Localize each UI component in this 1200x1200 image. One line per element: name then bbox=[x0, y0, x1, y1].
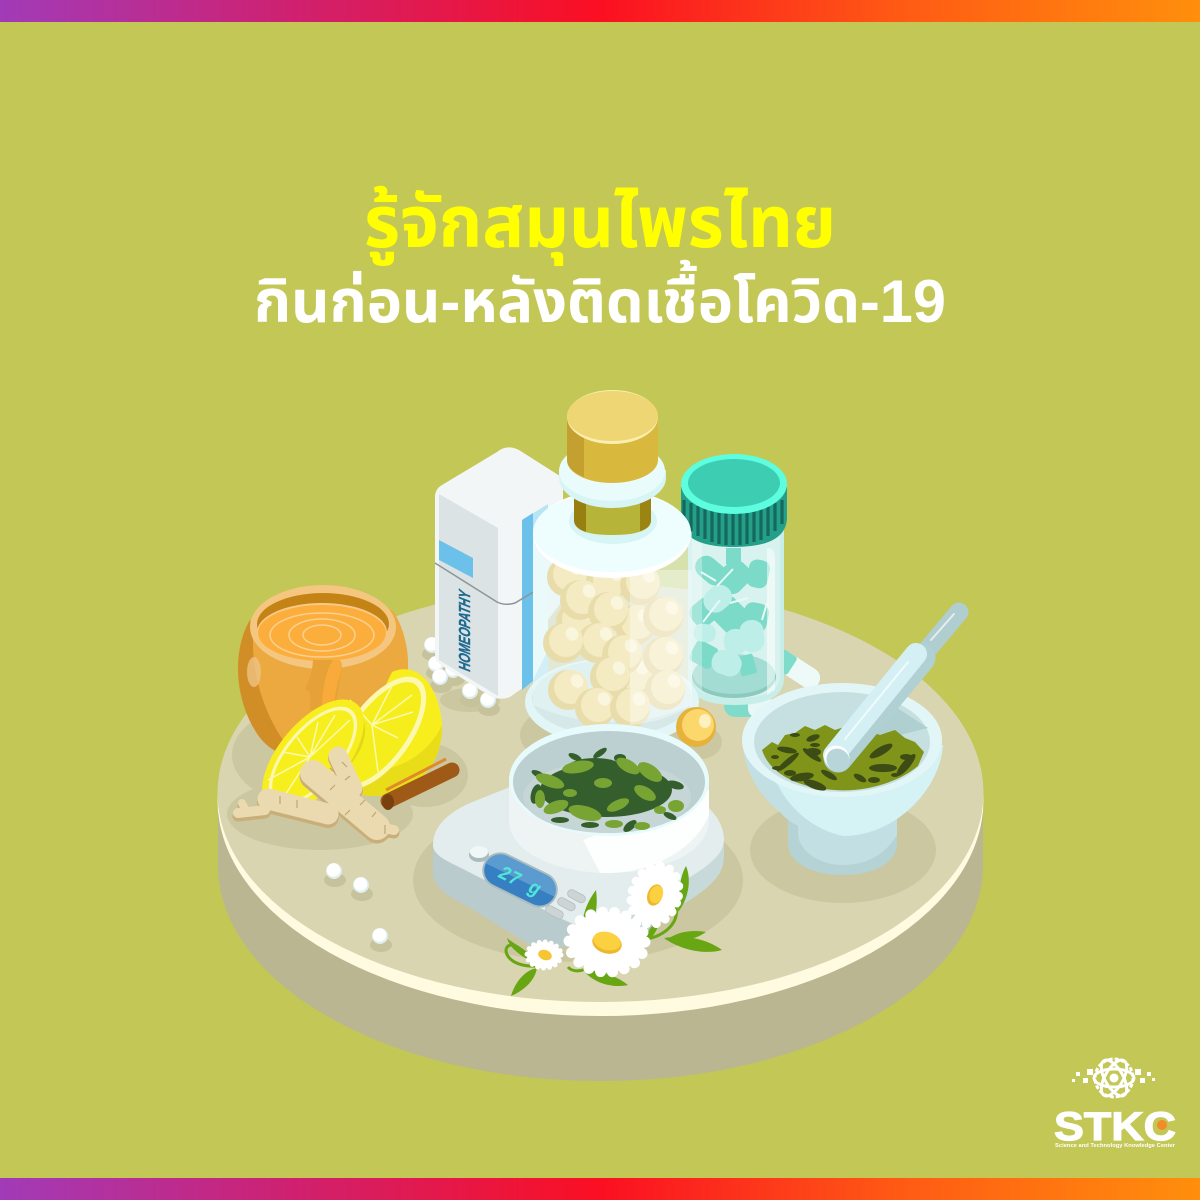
right flower bbox=[623, 859, 687, 931]
round platform bbox=[218, 584, 984, 1081]
logo tagline: Science and Technology Knowledge Center bbox=[1055, 1143, 1176, 1149]
cinnamon stick bbox=[382, 759, 452, 810]
jar capsules bbox=[686, 548, 771, 677]
display reading: 27 g bbox=[494, 862, 544, 902]
pestle shaft bbox=[819, 654, 921, 776]
green capsule jar bbox=[681, 454, 824, 717]
logo dot bbox=[1157, 1120, 1167, 1130]
kitchen scale bbox=[433, 724, 724, 950]
mortar bowl bbox=[743, 745, 943, 836]
pestle handle bbox=[917, 612, 959, 662]
glass bottle of herbal pills bbox=[525, 390, 699, 746]
bottle cap bbox=[567, 390, 658, 483]
top gradient band bbox=[0, 0, 1200, 22]
rim bbox=[250, 585, 396, 669]
bottle collar bbox=[559, 470, 666, 508]
ground herbs bbox=[762, 725, 924, 793]
honey drip bbox=[306, 660, 342, 710]
mortar and pestle bbox=[742, 612, 959, 875]
small flower bbox=[527, 942, 561, 968]
lemons bbox=[243, 661, 444, 830]
platform shadows bbox=[227, 688, 936, 962]
ginger root bbox=[238, 756, 394, 834]
big lemon half bbox=[348, 669, 442, 796]
jar pale capsules bbox=[692, 580, 765, 680]
golden bead bbox=[676, 707, 716, 747]
small lemon half bbox=[258, 705, 365, 812]
honey pot bbox=[238, 585, 408, 760]
homeopathy box bbox=[435, 447, 563, 699]
chamomile flowers bbox=[506, 859, 722, 996]
jar lid bbox=[681, 454, 787, 547]
scale keys bbox=[544, 888, 587, 920]
title line 2: กินก่อน-หลังติดเชื้อโควิด-19 bbox=[254, 259, 946, 335]
logo wordmark: STKC bbox=[1054, 1105, 1176, 1149]
dried herbs bbox=[529, 746, 685, 834]
small lemon segments bbox=[268, 715, 350, 795]
scale display bbox=[476, 846, 564, 914]
bottle right reflection bbox=[630, 570, 692, 725]
title bbox=[254, 183, 946, 335]
bottle neck bbox=[574, 495, 651, 535]
pills bbox=[543, 557, 685, 728]
mortar foot bbox=[788, 815, 897, 875]
stems and leaves bbox=[506, 866, 722, 996]
bottle body bbox=[533, 532, 692, 722]
title line 1: รู้จักสมุนไพรไทย bbox=[364, 183, 836, 266]
bottle shoulder bbox=[533, 490, 691, 578]
honey surface bbox=[257, 603, 387, 661]
STKC logo bbox=[1054, 1056, 1176, 1149]
jar glass bbox=[688, 525, 784, 705]
bottle base bbox=[525, 658, 699, 746]
logo atom icon bbox=[1072, 1056, 1155, 1100]
scale button bbox=[469, 846, 489, 862]
big lemon segments bbox=[350, 680, 413, 772]
loose capsules bbox=[724, 649, 824, 717]
bottom gradient band bbox=[0, 1178, 1200, 1200]
large flower bbox=[569, 912, 645, 972]
scale bowl bbox=[509, 724, 709, 873]
small white pills bbox=[324, 637, 500, 952]
box label text: HOMEOPATHY bbox=[456, 587, 474, 673]
jar glass highlights bbox=[692, 530, 702, 692]
jar capsule highlights bbox=[701, 569, 767, 622]
